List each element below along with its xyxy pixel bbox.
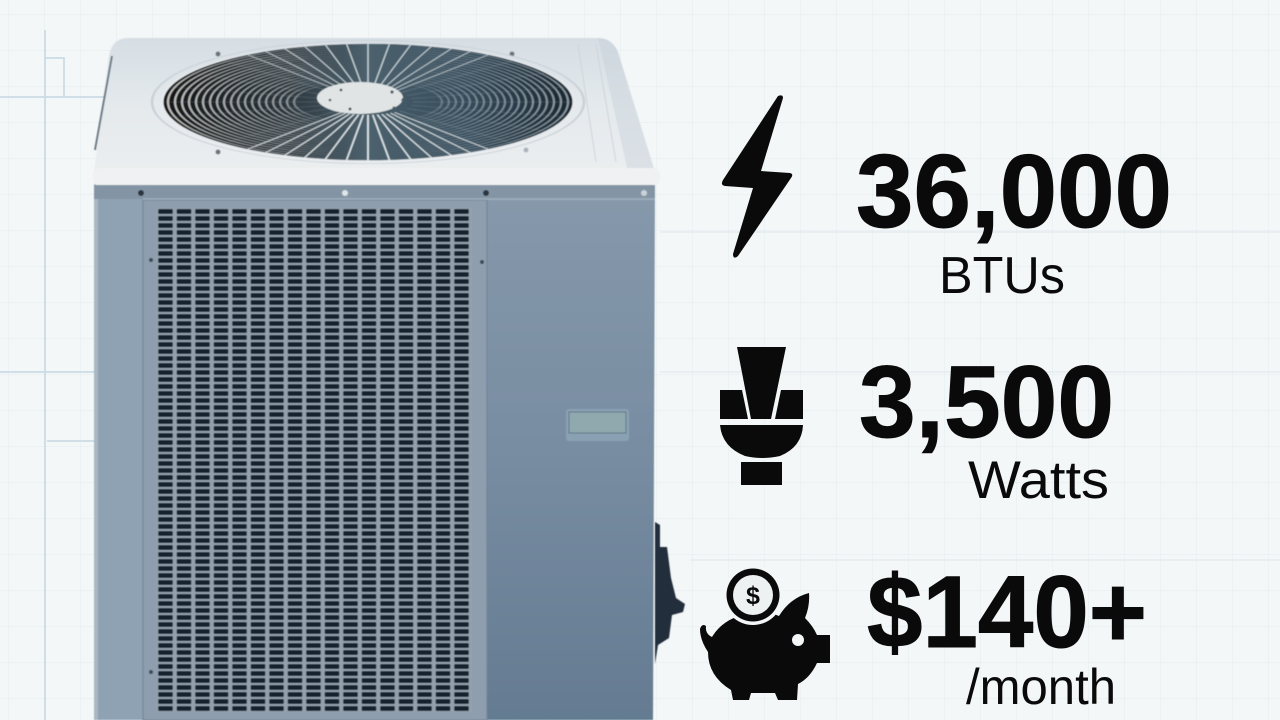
unit: BTUs: BTUs (939, 247, 1065, 305)
side bracket (655, 522, 685, 664)
air conditioner unit (93, 38, 685, 720)
unit: Watts: Watts (968, 451, 1109, 510)
icon: piggy bank with coin: $ (746, 582, 760, 610)
lid front band (93, 168, 660, 186)
service handle (566, 409, 629, 441)
grille panel (143, 200, 487, 720)
stat: Watts (720, 345, 1114, 510)
lid top (94, 38, 655, 172)
icon: toilet (720, 347, 803, 485)
icon: piggy bank with coin (700, 565, 830, 700)
fan guard (152, 40, 584, 164)
stat: monthly cost (700, 555, 1147, 715)
value: $140+: $140+ (867, 555, 1147, 669)
cabinet body (94, 184, 655, 720)
value: 3,500: 3,500 (859, 345, 1114, 459)
screws (138, 52, 647, 196)
fan hub (317, 82, 405, 114)
icon: lightning bolt (722, 95, 792, 258)
stat: BTUs (722, 95, 1172, 305)
unit: /month: /month (966, 659, 1116, 715)
value: 36,000: 36,000 (856, 134, 1172, 250)
